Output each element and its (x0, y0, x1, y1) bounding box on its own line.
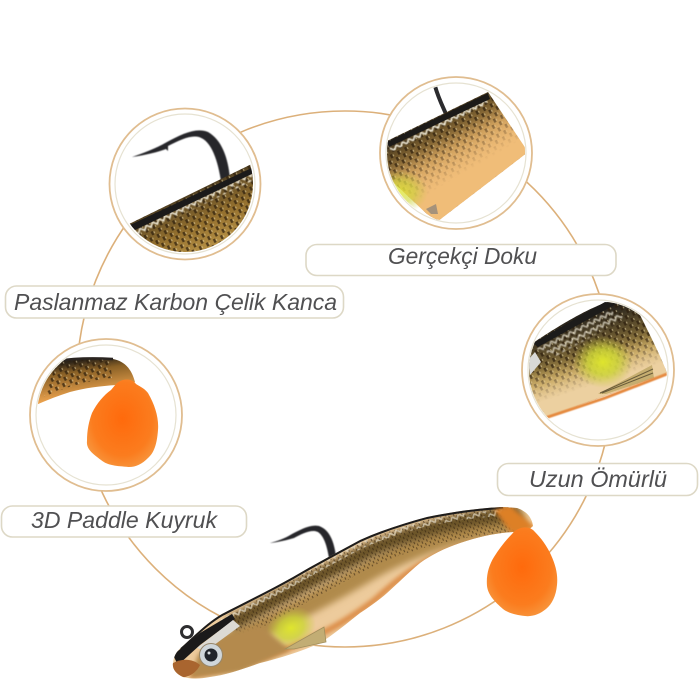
paddle (87, 380, 158, 467)
hook close-up (132, 130, 230, 181)
hook stub (435, 86, 446, 114)
tie eye (182, 626, 192, 638)
main lure hook (270, 526, 336, 558)
label: Uzun Ömürlü (498, 464, 698, 496)
pectoral fin (285, 627, 326, 649)
label: Gerçekçi Doku (306, 243, 616, 276)
head (190, 625, 290, 678)
lure body (527, 302, 667, 418)
callout circle: texture detail (372, 77, 532, 229)
label: Uzun Ömürlü: Uzun Ömürlü (529, 466, 667, 492)
main lure paddle (487, 527, 557, 616)
tail body (36, 358, 135, 405)
lure back with scales (130, 164, 253, 252)
label: Gerçekçi Doku: Gerçekçi Doku (388, 243, 537, 269)
large connecting ring (77, 111, 613, 647)
lure body with scales (387, 92, 525, 220)
eye (200, 644, 222, 666)
callout circle: durability detail (522, 294, 674, 446)
callout circle: paddle tail detail (30, 339, 182, 491)
label: 3D Paddle Kuyruk: 3D Paddle Kuyruk (31, 507, 218, 533)
label: 3D Paddle Kuyruk (2, 506, 246, 537)
label: Paslanmaz Karbon Çelik Kanca: Paslanmaz Karbon Çelik Kanca (14, 289, 337, 315)
main lure (172, 507, 558, 678)
main lure body (172, 507, 533, 678)
callout circle: hook detail (110, 108, 270, 270)
